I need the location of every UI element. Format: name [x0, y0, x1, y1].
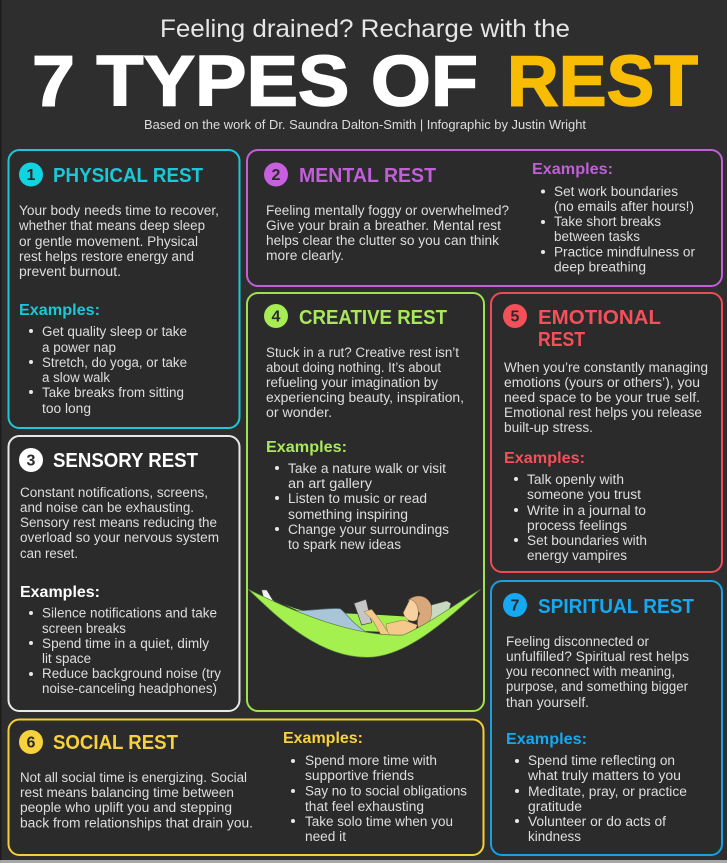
heading: sensory rest: SENSORY REST [53, 450, 198, 472]
examples list [514, 472, 647, 563]
examples list [29, 324, 187, 416]
description: Feeling mentally foggy or overwhelmed? [266, 203, 509, 218]
description: refueling your imagination by [266, 375, 438, 390]
description: built-up stress. [504, 420, 593, 435]
examples list: too long [42, 401, 91, 416]
description: prevent burnout. [19, 264, 121, 279]
heading: emotional rest: EMOTIONAL [538, 307, 661, 329]
heading: spiritual rest [503, 593, 694, 618]
description: or gentle movement. Physical [19, 234, 198, 249]
description: helps clear the clutter so you can think [266, 233, 499, 248]
examples list: a power nap [42, 340, 116, 355]
description: or wonder. [266, 405, 332, 420]
description: rest helps restore energy and [19, 249, 194, 264]
heading: social rest: SOCIAL REST [53, 732, 178, 754]
heading: social rest [19, 730, 178, 754]
examples list [291, 753, 467, 844]
description: Sensory rest means reducing the [20, 515, 217, 530]
examples list [541, 184, 696, 274]
heading: emotional rest: REST [538, 329, 585, 351]
examples list [29, 606, 221, 696]
description: experiencing beauty, inspiration, [266, 390, 464, 405]
panel: physical rest [8, 150, 240, 428]
examples list: Listen to music or read [288, 491, 427, 506]
attribution: Based on the work of Dr. Saundra Dalton-Smith | Infographic by Justin Wright [144, 118, 587, 132]
examples list: screen breaks [42, 621, 126, 636]
description: Give your brain a breather. Mental rest [266, 218, 501, 233]
examples list: (no emails after hours!) [554, 199, 694, 214]
examples list: Spend more time with [305, 753, 437, 768]
examples list [515, 753, 687, 844]
examples heading: Examples: [283, 730, 363, 747]
description [18, 203, 219, 279]
examples heading: Examples: [20, 584, 100, 601]
heading: social rest: 6 [27, 734, 36, 752]
examples list: Set boundaries with [527, 533, 647, 548]
examples list: Take a nature walk or visit [288, 461, 446, 476]
panel: social rest [8, 720, 484, 855]
heading: creative rest: 4 [272, 308, 281, 326]
examples list: Take short breaks [554, 214, 661, 229]
description: emotions (yours or others’), you [504, 375, 700, 390]
heading: mental rest: MENTAL REST [299, 165, 436, 187]
examples list: deep breathing [554, 260, 646, 274]
examples heading: Examples: [532, 161, 613, 178]
examples list: kindness [528, 829, 581, 844]
description: Not all social time is energizing. Social [20, 770, 247, 785]
examples list: what truly matters to you [527, 768, 681, 783]
panel: mental rest [247, 150, 722, 286]
description [266, 203, 509, 263]
examples list: something inspiring [288, 507, 408, 522]
heading: physical rest [19, 162, 203, 187]
examples list: someone you trust [527, 487, 641, 502]
heading: creative rest: CREATIVE REST [299, 307, 447, 329]
description: Feeling disconnected or [506, 634, 649, 649]
subtitle: feeling drained: Feeling drained? Recharge with the [160, 15, 570, 43]
examples list: Take solo time when you [305, 814, 453, 829]
description: than yourself. [506, 695, 589, 710]
examples list: gratitude [528, 799, 582, 814]
examples list: an art gallery [288, 476, 372, 491]
description [504, 360, 708, 435]
heading: sensory rest: 3 [27, 452, 36, 470]
heading: mental rest: 2 [272, 167, 281, 184]
description: rest means balancing time between [20, 785, 234, 800]
main title [32, 42, 698, 122]
description: purpose, and something bigger [506, 679, 688, 694]
description: can reset. [20, 546, 78, 561]
heading: emotional rest: 5 [511, 308, 520, 326]
examples list: need it [305, 829, 346, 844]
examples list: Reduce background noise (try [42, 666, 221, 681]
examples list: process feelings [527, 518, 627, 533]
examples heading: Examples: [19, 302, 100, 319]
examples list: Say no to social obligations [305, 784, 467, 798]
description: you reconnect with meaning, [506, 664, 675, 679]
panel: spiritual rest [491, 581, 722, 855]
examples list: between tasks [554, 229, 640, 244]
main title: 7 TYPES OF [32, 42, 478, 122]
description [266, 345, 464, 420]
examples list: Set work boundaries [554, 184, 678, 199]
description: Constant notifications, screens, [20, 485, 208, 500]
examples list: Spend time in a quiet, dimly [42, 636, 209, 651]
panel: sensory rest [8, 436, 240, 711]
examples list: Silence notifications and take [42, 606, 217, 620]
description: about doing nothing. It’s about [266, 360, 441, 375]
examples heading: Examples: [506, 731, 587, 748]
examples heading: Examples: [266, 439, 347, 456]
description: and noise can be exhausting. [20, 500, 194, 515]
description: overload so your nervous system [20, 530, 219, 545]
description: Your body needs time to recover, [19, 203, 219, 218]
examples list [275, 461, 449, 552]
description: Stuck in a rut? Creative rest isn’t [266, 345, 459, 360]
examples list: a slow walk [42, 370, 110, 385]
examples list: Change your surroundings [288, 522, 449, 537]
examples list: lit space [42, 651, 91, 666]
description [20, 485, 219, 561]
examples list: energy vampires [527, 548, 627, 563]
main title: REST [507, 42, 698, 122]
panel: emotional rest [491, 293, 722, 572]
title block [32, 15, 698, 132]
description: need space to be your true self. [504, 390, 700, 405]
description [20, 770, 253, 830]
examples list: Volunteer or do acts of [528, 814, 666, 829]
examples list: to spark new ideas [288, 537, 401, 552]
description: people who uplift you and stepping [20, 800, 232, 815]
examples list: supportive friends [305, 768, 414, 783]
heading: creative rest [264, 304, 447, 329]
examples list: Talk openly with [527, 472, 624, 487]
examples heading: Examples: [504, 450, 585, 467]
panel: creative rest [247, 293, 484, 711]
examples list: Get quality sleep or take [42, 324, 187, 339]
heading: spiritual rest: 7 [511, 598, 520, 614]
description: unfulfilled? Spiritual rest helps [506, 649, 689, 664]
heading: emotional rest [503, 304, 661, 351]
description: back from relationships that drain you. [20, 816, 253, 830]
examples list: Spend time reflecting on [528, 753, 675, 768]
examples list: Take breaks from sitting [42, 385, 184, 400]
examples list: Practice mindfulness or [554, 244, 696, 260]
examples list: Stretch, do yoga, or take [42, 355, 187, 370]
heading: spiritual rest: SPIRITUAL REST [538, 596, 694, 618]
examples list: Write in a journal to [527, 503, 646, 518]
examples list: Meditate, pray, or practice [528, 784, 687, 799]
description: Emotional rest helps you release [504, 405, 702, 420]
examples list: noise-canceling headphones) [42, 681, 217, 696]
heading: physical rest: 1 [27, 167, 36, 184]
description: When you’re constantly managing [504, 360, 708, 375]
examples list: that feel exhausting [305, 799, 424, 814]
description [506, 634, 689, 710]
illustration: person reading in a hammock [248, 589, 481, 657]
description: whether that means deep sleep [18, 218, 205, 233]
description: more clearly. [266, 248, 344, 263]
heading: physical rest: PHYSICAL REST [53, 165, 203, 187]
